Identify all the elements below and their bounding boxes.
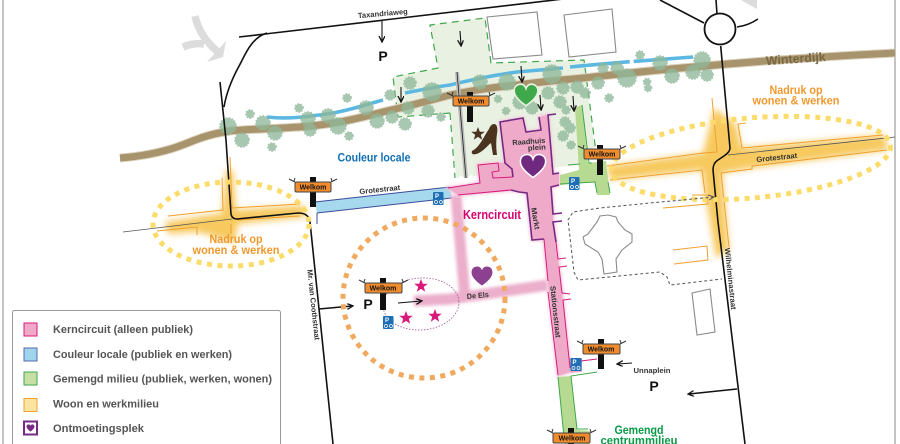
arrow: grey entry top right [741, 0, 757, 9]
couleur locale: blue Grotestraat band [315, 187, 452, 224]
street labels: Grotestraat [359, 183, 401, 196]
woon en werkmilieu: left yellow street zone [157, 157, 306, 244]
kerncircuit: pink centre shape [448, 115, 582, 376]
zone: gemengd milieu dashed area [393, 18, 596, 178]
street labels: Raadhuis [512, 136, 546, 147]
kerncircuit: pink border lines [448, 163, 597, 375]
icon: pink stars [399, 279, 442, 324]
orange dotted circle De Els [343, 218, 505, 378]
street labels: De Els [466, 290, 489, 301]
legend: Kerncircuit: Kerncircuit (alleen publiek) [53, 324, 193, 336]
gemengd milieu: green street areas [558, 105, 610, 444]
roads: black network [220, 0, 758, 444]
icon: welkom sign Grotestraat west [289, 177, 337, 207]
yellow dotted ellipse right [608, 106, 894, 210]
icon: welkom sign De Els: Welkom [370, 286, 396, 292]
street labels: Grotestraat [756, 151, 798, 164]
small black arrows [382, 21, 632, 364]
arrow: grey entry top left [183, 16, 226, 62]
icon: parking bike Grotestraat [433, 192, 444, 205]
woon en werkmilieu: right yellow street zone [607, 98, 888, 264]
kerncircuit: blurred pink De Els route [414, 195, 548, 301]
icon: welkom sign centre: Welkom [458, 98, 484, 106]
icon: welkom sign centre [447, 92, 495, 122]
icon: welkom sign south: Welkom [559, 436, 585, 442]
icon: purple heart De Els [472, 266, 492, 286]
legend: Gemengd milieu: Gemengd milieu (publiek, werken, wonen) [53, 374, 272, 386]
icon: welkom sign De Els [359, 278, 408, 310]
legend: Ontmoetingsplek [24, 422, 145, 435]
icon: green heart [514, 84, 538, 106]
label: Couleur locale: Couleur locale [338, 150, 411, 164]
icon: welkom sign east [578, 145, 626, 175]
street labels [305, 7, 798, 375]
icon: parking bike Stationsstraat: P [572, 360, 577, 366]
water: blue stream [267, 57, 693, 118]
ontmoetingsplek: purple outline Raadhuisplein [500, 114, 562, 242]
legend: Woon en werkmilieu: Woon en werkmilieu [53, 398, 159, 410]
label: Kerncircuit: Kerncircuit [463, 208, 522, 222]
thin Grotestraat lines [123, 137, 895, 232]
label: Nadruk op wonen en werken left: Nadruk op [210, 234, 262, 246]
icon: welkom sign south [547, 428, 596, 444]
yellow dotted ellipse left [153, 182, 309, 266]
icon: parking bike east: P [571, 179, 575, 185]
street labels: plein [528, 142, 547, 153]
parking letters: P [649, 378, 659, 394]
icon: parking bike De Els [383, 316, 394, 329]
icon: purple heart Raadhuisplein [520, 154, 546, 178]
purple dotted ellipse [381, 275, 461, 333]
parking letters: P [378, 48, 388, 64]
street labels: Taxandriaweg [357, 7, 408, 20]
label: Nadruk op wonen en werken left [192, 234, 280, 257]
icon: parking bike east [569, 177, 580, 190]
street labels: Stationsstraat [548, 285, 563, 339]
legend: Couleur locale: Couleur locale (publiek en werken) [53, 349, 232, 361]
icon: parking bike Stationsstraat [570, 358, 582, 371]
icon: star and shoe [471, 124, 497, 155]
road: Winterdijk [120, 53, 895, 158]
label: Nadruk op wonen en werken right [752, 85, 840, 108]
icon: parking bike De Els: P [385, 318, 389, 324]
dotted access route [568, 195, 722, 285]
icon: welkom sign Stationsstraat: Welkom [588, 346, 614, 354]
parking letters: P [363, 296, 373, 312]
trees [220, 51, 713, 151]
street labels: Wilhelminastraat [723, 247, 738, 311]
icon: welkom sign Stationsstraat [577, 339, 626, 369]
label: Gemengd centrummilieu [600, 423, 678, 444]
label: Nadruk op wonen en werken left: wonen & werken [192, 245, 280, 257]
icon: welkom sign east: Welkom [589, 152, 615, 158]
icon: welkom sign Grotestraat west: Welkom [300, 184, 326, 192]
parking letters [363, 48, 659, 394]
label: Gemengd centrummilieu: Gemengd [614, 423, 664, 437]
street labels: Mr. van Coothstraat [305, 269, 322, 341]
label: Nadruk op wonen en werken right: wonen & werken [752, 96, 840, 108]
legend: Ontmoetingsplek: Ontmoetingsplek [53, 423, 145, 435]
legend panel [12, 310, 280, 444]
street labels: Unnaplein [634, 366, 671, 375]
label: Nadruk op wonen en werken right: Nadruk op [770, 85, 822, 97]
buildings: grey outlines [487, 9, 715, 335]
long grey arrow [457, 72, 472, 183]
label: Winterdijk: Winterdijk [765, 50, 826, 68]
roundabout [704, 14, 736, 44]
icon: parking bike Grotestraat: P [435, 194, 439, 200]
street labels: Markt [529, 207, 542, 231]
